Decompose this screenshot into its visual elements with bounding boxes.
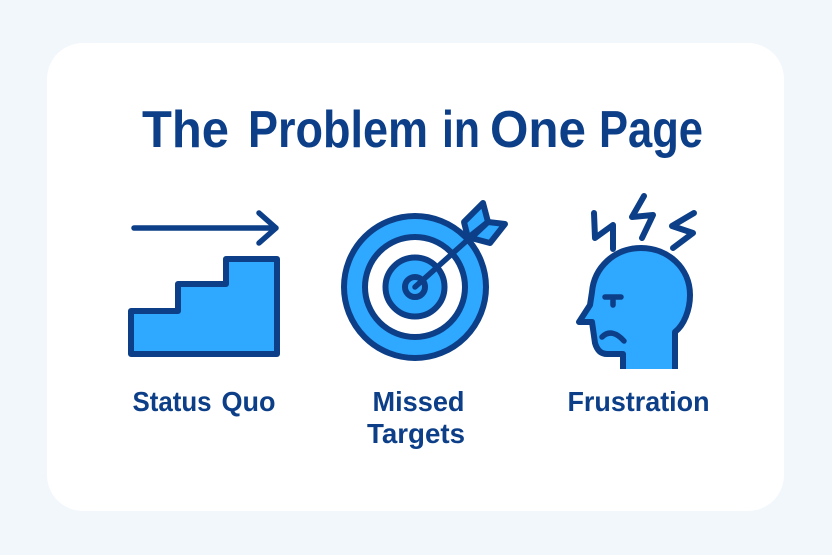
icon: frustrated head bbox=[579, 196, 694, 369]
bolt left bbox=[594, 213, 613, 249]
white ring bbox=[365, 237, 465, 337]
brow bbox=[605, 297, 621, 305]
inner ring bbox=[386, 258, 444, 316]
stairs bbox=[131, 259, 277, 354]
dart shaft bbox=[415, 236, 472, 287]
frown bbox=[602, 333, 624, 341]
arrow: flat trajectory bbox=[134, 213, 276, 243]
label: Missed Targets bbox=[367, 386, 465, 449]
outer ring bbox=[344, 216, 486, 358]
label: Status Quo bbox=[132, 386, 276, 417]
dart fletching upper bbox=[464, 203, 488, 238]
title: in bbox=[442, 101, 480, 159]
icon: staircase with arrow bbox=[131, 213, 277, 354]
title bbox=[142, 101, 703, 159]
label: Status Quo: Status bbox=[132, 386, 212, 417]
bolt middle bbox=[632, 196, 653, 238]
panel: white card bbox=[47, 43, 784, 511]
label: Frustration: Frustration bbox=[568, 386, 710, 417]
title: Page bbox=[599, 101, 703, 159]
dart fletching lower bbox=[471, 222, 505, 243]
bolt right bbox=[672, 213, 694, 248]
head outline bbox=[579, 248, 690, 369]
title: Problem bbox=[248, 101, 428, 159]
head fill bbox=[579, 248, 690, 369]
bullseye bbox=[405, 277, 425, 297]
icon: target with dart bbox=[344, 203, 505, 358]
label: Missed Targets: Missed bbox=[372, 386, 464, 417]
label: Missed Targets: Targets bbox=[367, 418, 465, 449]
title: The bbox=[142, 101, 229, 159]
title: One bbox=[490, 101, 586, 159]
label: Status Quo: Quo bbox=[222, 386, 276, 417]
